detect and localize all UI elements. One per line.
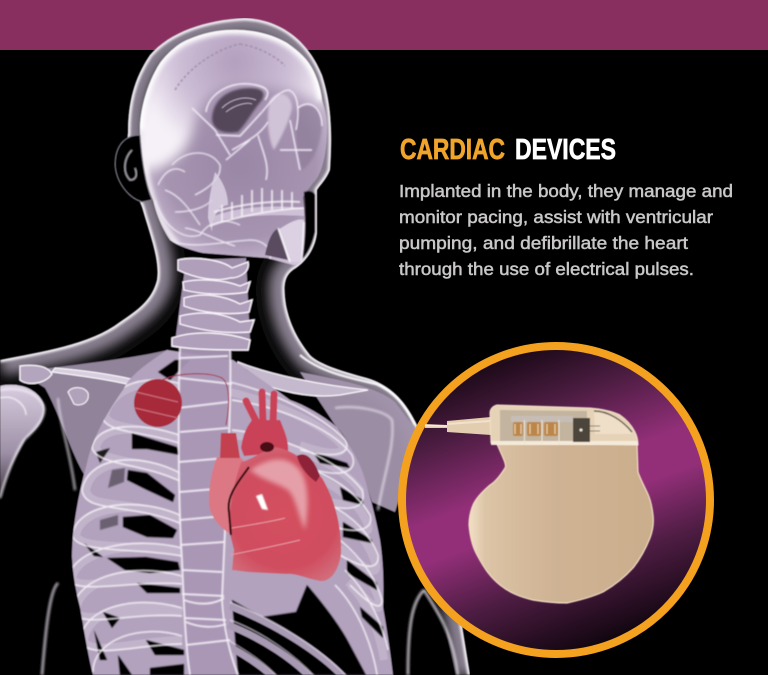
cervical vertebrae: [172, 258, 254, 350]
heading: [400, 134, 616, 166]
left lower arm edge: [42, 583, 58, 675]
right rib bands: [230, 392, 384, 660]
left humerus: [0, 385, 44, 498]
pacemaker body: [469, 444, 653, 603]
description text: through the use of electrical pulses.: [399, 259, 694, 279]
pacemaker lead: [425, 417, 491, 435]
black gap beside teeth: [303, 191, 315, 258]
top banner: [0, 0, 768, 50]
description text: Implanted in the body, they manage and: [399, 181, 733, 201]
ear: [115, 135, 152, 202]
great vessels: [246, 392, 274, 425]
description text: monitor pacing, assist with ventricular: [399, 207, 713, 227]
cheek and jaw contours: [155, 153, 271, 262]
heading: DEVICES: [515, 134, 616, 166]
left rib bands: [72, 384, 182, 648]
left atrium: [297, 454, 320, 482]
black gaps: right: [158, 360, 383, 675]
right shoulder and scapula: [236, 355, 418, 512]
lead wire: [162, 374, 229, 425]
left clavicle and scapula: [20, 350, 168, 490]
pacemaker header: [490, 405, 638, 445]
feedthrough block: [573, 418, 590, 442]
skull: [132, 24, 330, 265]
aortic shadow: [260, 442, 274, 452]
heart: [209, 392, 341, 581]
coil cells: [513, 422, 523, 436]
pacemaker implant in chest: [134, 374, 229, 427]
description text: pumping, and defibrillate the heart: [399, 233, 688, 253]
diagonal lower right ribs: [226, 606, 348, 675]
ghost ribs across heart: [230, 518, 300, 555]
spine: [172, 258, 254, 675]
right lower arm lines: [408, 593, 456, 675]
dark groove: [229, 467, 249, 535]
pale highlights: [250, 459, 307, 530]
vena cava: [220, 433, 240, 458]
left black gap under arm: [0, 434, 73, 675]
description text: [399, 181, 733, 279]
second orbit and nose bones: [268, 94, 292, 150]
black gaps: left: [84, 433, 184, 675]
figure: x-ray human torso and skull: [0, 18, 470, 675]
teeth rows: [210, 206, 304, 222]
right atrium: [209, 457, 250, 535]
dark orbit: [212, 88, 264, 133]
body silhouette with glow: [0, 18, 470, 675]
rib cage: [68, 350, 393, 675]
lower incisor wedge: [278, 219, 304, 262]
nasal opening: [208, 172, 228, 232]
suture: [175, 44, 285, 90]
heading: CARDIAC: [400, 134, 505, 166]
ventricle: [229, 447, 341, 581]
cranium highlight: [132, 24, 330, 171]
pacemaker circle callout: [402, 346, 710, 654]
